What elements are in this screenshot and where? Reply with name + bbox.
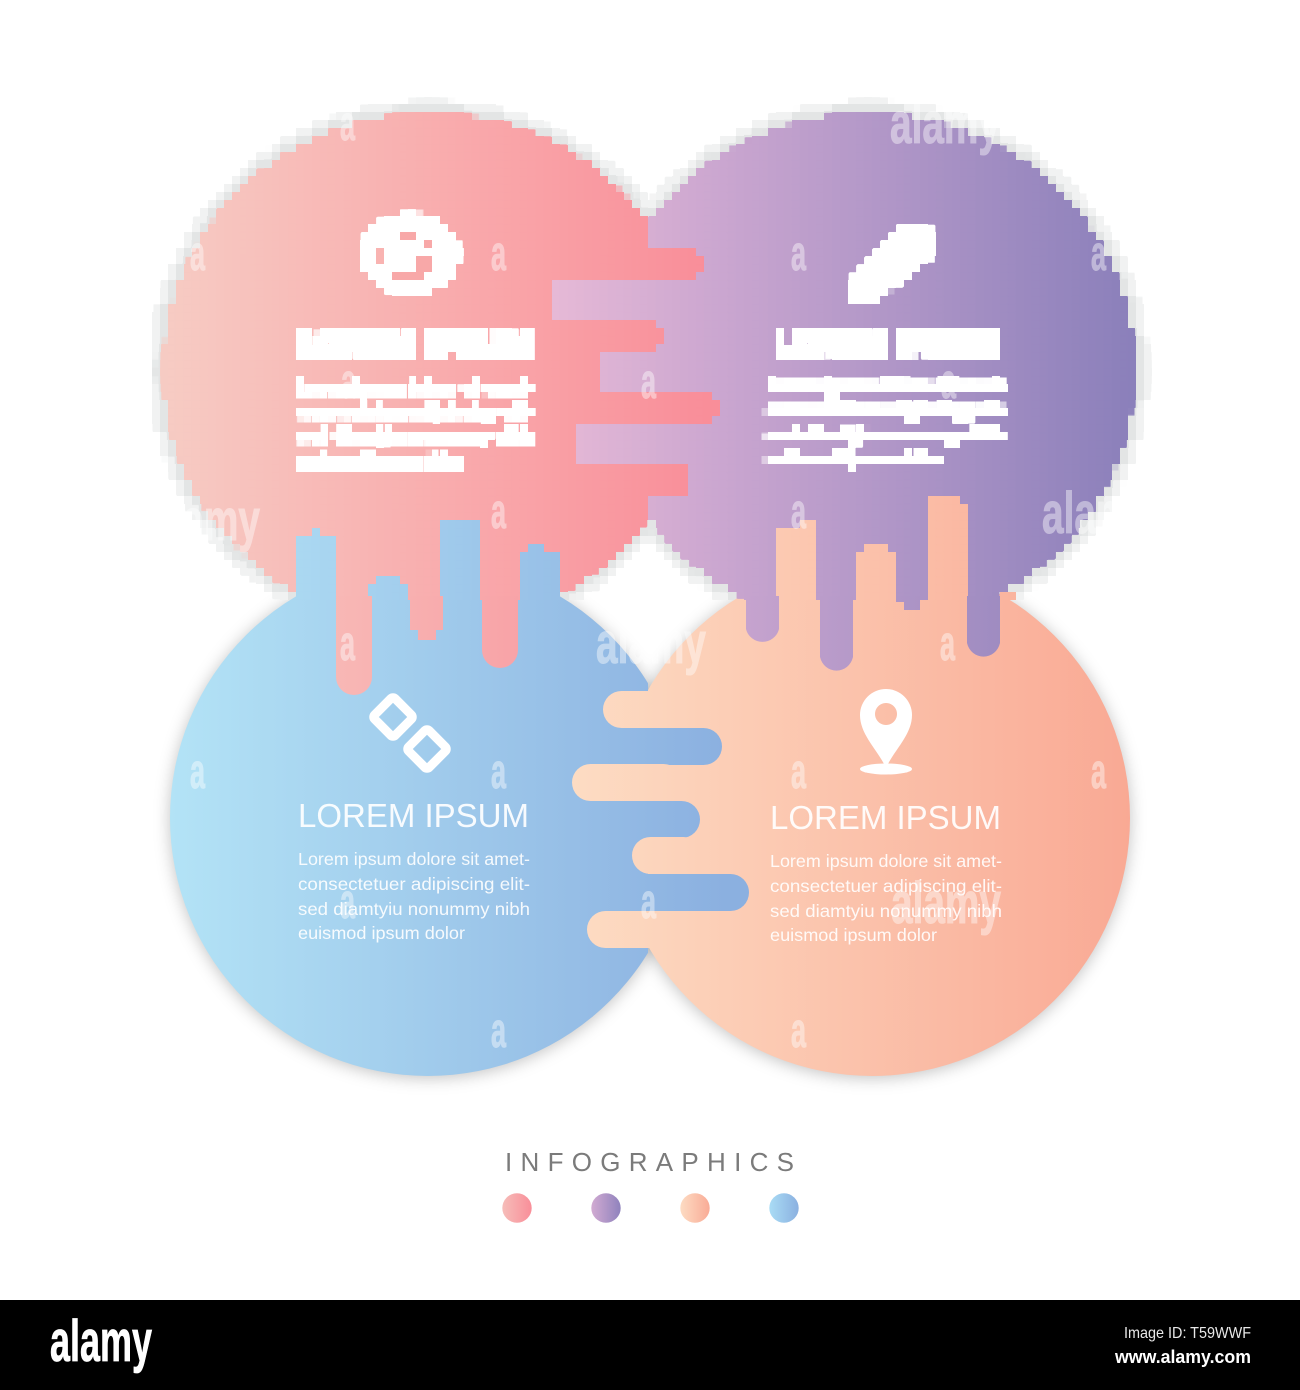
watermarks: a <box>791 485 806 539</box>
watermarks: a <box>791 1004 806 1058</box>
peach circle <box>614 560 1130 1076</box>
pink circle <box>160 112 648 600</box>
body: Lorem ipsum dolore sit amet- <box>770 851 1002 871</box>
watermarks: a <box>491 485 506 539</box>
legend dots <box>502 1193 799 1223</box>
body: Lorem ipsum dolore sit amet- <box>298 849 530 869</box>
footer url: www.alamy.com <box>1114 1347 1251 1367</box>
body: sed diamtyiu nonummy nibh <box>298 899 530 919</box>
watermarks: alamy <box>150 488 260 553</box>
footer image id: Image ID: T59WWF <box>1124 1325 1251 1342</box>
body text: pink panel: euismod ipsum dolor <box>299 452 464 472</box>
body: consectetuer adipiscing elit- <box>298 874 530 894</box>
watermarks: alamy <box>891 871 1001 936</box>
watermarks: a <box>190 227 205 281</box>
blue bars rising into the pink circle <box>296 520 560 604</box>
icon: pencil <box>845 222 936 304</box>
watermarks: a <box>190 745 205 799</box>
body <box>298 849 530 943</box>
body <box>770 851 1002 945</box>
body text: purple panel: Lorem ipsum dolore sit amet- <box>769 376 1005 396</box>
watermarks: a <box>340 875 355 929</box>
body text: pink panel: Lorem ipsum dolore sit amet- <box>299 377 531 397</box>
body: euismod ipsum dolor <box>770 925 937 945</box>
heading: LOREM IPSUM <box>298 797 529 834</box>
body text: pink panel: sed diamtyiu nonummy nibh <box>299 425 531 445</box>
watermarks: a <box>491 227 506 281</box>
soft shadow of the lower circles <box>170 562 1130 1078</box>
pink drips over the blue circle <box>336 596 518 695</box>
watermarks: a <box>791 745 806 799</box>
watermarks: a <box>1091 227 1106 281</box>
icon: chain link <box>372 696 448 770</box>
watermarks: a <box>341 355 356 409</box>
watermarks: a <box>491 745 506 799</box>
panel: lower circles with interlocking fingers <box>170 560 1130 1076</box>
watermarks: a <box>641 355 656 409</box>
purple fingers <box>552 280 686 464</box>
footer bar <box>0 1300 1300 1390</box>
watermarks: a <box>641 875 656 929</box>
body text: pink panel: consectetuer adipiscing elit- <box>299 401 531 421</box>
body: euismod ipsum dolor <box>298 923 465 943</box>
watermarks <box>150 91 1152 1058</box>
heading: pink panel: LOREM IPSUM <box>300 325 530 362</box>
text block: peach panel <box>770 799 1002 945</box>
blue fingers <box>610 728 749 911</box>
watermarks: alamy <box>1042 481 1152 546</box>
purple drips over the peach circle <box>746 596 1000 671</box>
body: consectetuer adipiscing elit- <box>770 876 1002 896</box>
text block: blue panel <box>298 797 530 943</box>
blue circle <box>170 596 648 1076</box>
watermarks: a <box>340 97 355 151</box>
body: sed diamtyiu nonummy nibh <box>770 901 1002 921</box>
body text: purple panel: consectetuer adipiscing elit- <box>769 400 1005 420</box>
icon: location pin <box>860 689 912 774</box>
watermarks: a <box>941 355 956 409</box>
body text: purple panel: sed diamtyiu nonummy nibh <box>769 425 1001 445</box>
heading: LOREM IPSUM <box>770 799 1001 836</box>
watermarks: alamy <box>890 91 1000 156</box>
watermarks: a <box>1091 745 1106 799</box>
watermarks: alamy <box>596 611 706 676</box>
purple circle <box>601 113 1135 627</box>
watermarks: a <box>791 227 806 281</box>
watermarks: a <box>940 617 955 671</box>
title: infographics: INFOGRAPHICS <box>505 1147 794 1177</box>
body text: purple panel: euismod ipsum dolor <box>769 449 941 469</box>
body text: pink panel <box>299 377 531 472</box>
watermarks: a <box>340 617 355 671</box>
peach fingers <box>572 691 703 948</box>
pixelated halo of the upper circles <box>149 100 1149 640</box>
panel: upper circles, pixelated <box>163 113 1135 627</box>
icon: smiley <box>359 212 461 296</box>
footer logo: alamy <box>50 1309 152 1374</box>
watermarks: a <box>491 1004 506 1058</box>
peach bars rising into the purple circle <box>776 496 1016 604</box>
pink fingers <box>600 248 720 496</box>
body text: purple panel <box>769 376 1005 469</box>
heading: purple panel: LOREM IPSUM <box>775 325 997 362</box>
